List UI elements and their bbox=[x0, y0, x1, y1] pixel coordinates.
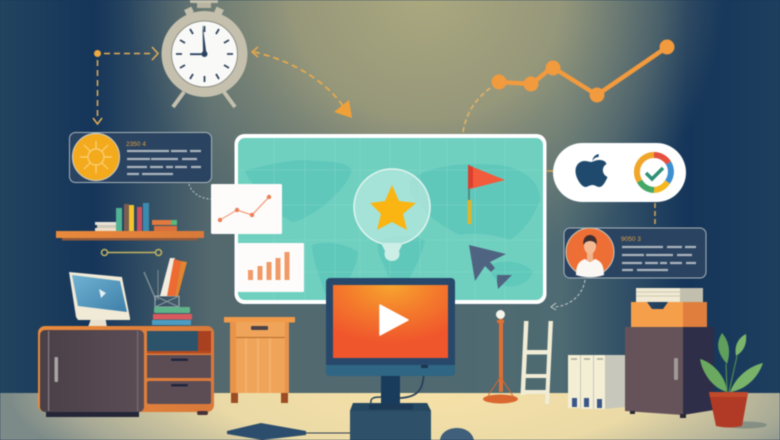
line chart card bbox=[211, 184, 282, 234]
profile card: right: 9050 3 bbox=[621, 236, 641, 243]
pencil cup and book stack bbox=[144, 258, 192, 325]
monitor with video play bbox=[326, 278, 455, 440]
binders bbox=[568, 355, 625, 409]
line chart: top right bbox=[463, 40, 674, 132]
bar chart card bbox=[238, 243, 304, 292]
dashed arrow: card to map bbox=[551, 280, 585, 310]
books bbox=[95, 203, 177, 231]
profile card: right bbox=[564, 228, 706, 278]
side table bbox=[224, 317, 295, 403]
wall shelf with books bbox=[56, 203, 204, 240]
panel: world map bbox=[234, 134, 546, 304]
icon: flag bbox=[468, 165, 505, 224]
world map landmasses bbox=[245, 160, 540, 298]
mouse bbox=[440, 428, 474, 440]
dashed connector: pill to card bbox=[654, 203, 656, 227]
dashed arrow: clock to map bbox=[252, 47, 352, 118]
icon: person bbox=[576, 235, 604, 277]
dotted connector: card to chart bbox=[189, 184, 211, 199]
icon: lightbulb with star bbox=[354, 169, 430, 261]
profile card: left bbox=[70, 132, 212, 182]
profile card: left: 2350 4 bbox=[126, 141, 146, 148]
book stack bbox=[152, 307, 192, 325]
potted plant bbox=[700, 333, 767, 428]
icon: navigation arrow bbox=[469, 245, 512, 289]
floor lamp bbox=[483, 310, 518, 404]
map grid bbox=[247, 160, 516, 286]
dashed arrow: node to clock and card bbox=[93, 47, 158, 124]
desk with cabinet and drawers bbox=[38, 326, 214, 417]
icon: colored ring with check bbox=[637, 155, 671, 190]
desktop computer: small bbox=[69, 272, 130, 327]
connector: map to pill bbox=[547, 170, 554, 172]
laptop on floor bbox=[227, 423, 350, 440]
panel: logo pill bbox=[553, 143, 686, 202]
clock bbox=[162, 0, 248, 107]
floor bbox=[0, 393, 780, 440]
decorative rod under shelf bbox=[102, 250, 162, 256]
filing cabinet with tray and papers bbox=[625, 288, 714, 418]
icon: apple bbox=[576, 154, 608, 187]
icon: sun bbox=[80, 141, 112, 173]
ladder bbox=[520, 321, 553, 404]
